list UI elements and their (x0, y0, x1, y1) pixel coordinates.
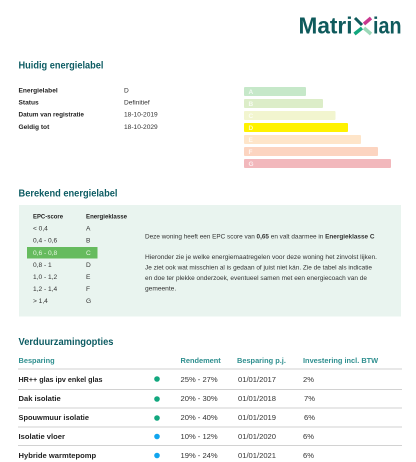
logo: Matrixian: ian (373, 12, 402, 38)
energy label bar chart: G (248, 161, 254, 168)
explanatory text: Hieronder zie je welke energiemaatregelen voor deze woning het zinvolst lijken. (145, 254, 377, 261)
energy label bar chart: E (248, 137, 254, 144)
row: HR++ glas: HR++ glas ipv enkel glas (18, 375, 102, 384)
table header (18, 356, 378, 365)
row: Dak isolatie: 7% (304, 394, 315, 403)
EPC score table: > 1,4 (33, 298, 48, 305)
heading: Berekend energielabel: Berekend energielabel (18, 188, 118, 200)
energy label bar chart: A (248, 89, 254, 96)
label details list: 18-10-2019 (124, 112, 158, 118)
EPC score table: EPC-score (33, 214, 63, 220)
EPC score table: D (86, 262, 91, 269)
row: Isolatie vloer: 01/01/2020 (238, 432, 276, 441)
row: Hybride warmtepomp: Hybride warmtepomp (18, 451, 97, 460)
EPC score table (27, 214, 127, 305)
table header: Rendement (180, 356, 221, 365)
row: Isolatie vloer (18, 432, 314, 441)
label details list: Geldig tot (18, 124, 50, 131)
explanatory text: en doe ter plekke onderzoek, eventueel samen met een energiecoach van de (145, 275, 367, 282)
EPC score table: < 0,4 (33, 226, 48, 232)
EPC score table: E (86, 274, 91, 281)
row: Isolatie vloer: 6% (303, 432, 314, 441)
EPC score table: F (86, 286, 90, 293)
row: Dak isolatie (18, 394, 315, 403)
table header: Investering incl. BTW (303, 356, 378, 365)
row: Isolatie vloer: Isolatie vloer (18, 432, 65, 441)
label details list: Energielabel (18, 88, 58, 94)
EPC score table: 0,4 - 0,6 (33, 238, 58, 244)
label details list: Datum van registratie (18, 112, 84, 118)
heading: Verduurzamingopties: Verduurzamingopties (18, 336, 114, 348)
explanatory text (145, 234, 377, 292)
row: Spouwmuur isolatie: 6% (304, 413, 315, 422)
table header: Besparing (18, 356, 55, 365)
label details list: 18-10-2029 (124, 124, 158, 131)
panel: berekend energielabel (19, 205, 401, 316)
label details list: Status (18, 100, 39, 106)
EPC score table: 0,6 - 0,8 (33, 250, 58, 257)
logo: Matrixian (298, 12, 402, 38)
label details list (18, 88, 158, 131)
energy label bar chart: F (248, 149, 252, 156)
table: verduurzamingopties (18, 356, 402, 460)
row: Spouwmuur isolatie: 01/01/2019 (238, 413, 276, 422)
row: Hybride warmtepomp: 19% - 24% (180, 451, 218, 460)
EPC score table: Energieklasse (86, 214, 127, 220)
row: Hybride warmtepomp: 6% (303, 451, 314, 460)
EPC score table: C (86, 250, 91, 257)
heading: Huidig energielabel: Huidig energielabel (18, 60, 104, 72)
row: Spouwmuur isolatie: Spouwmuur isolatie (18, 413, 89, 422)
EPC score table: G (86, 298, 91, 305)
EPC score table: B (86, 238, 91, 244)
row: HR++ glas: 01/01/2017 (238, 375, 276, 384)
energy label bar chart: C (248, 113, 254, 120)
table header: Besparing p.j. (237, 356, 286, 365)
energy label bar chart (244, 87, 391, 168)
explanatory text: Deze woning heeft een EPC score van 0,65 en valt daarmee in Energieklasse C (145, 234, 375, 240)
EPC score table: 1,2 - 1,4 (33, 286, 58, 293)
row: Hybride warmtepomp (18, 451, 314, 460)
label details list: Definitief (124, 100, 150, 106)
row: Dak isolatie: 01/01/2018 (238, 394, 276, 403)
row: HR++ glas (18, 375, 314, 384)
row: HR++ glas: 25% - 27% (180, 375, 218, 384)
explanatory text: gemeente. (145, 286, 176, 292)
explanatory text: Je ziet ook wat misschien al is gedaan of juist niet kán. Zie de tabel als indicatie (145, 264, 372, 272)
EPC score table: 1,0 - 1,2 (33, 274, 58, 281)
row: Dak isolatie: Dak isolatie (18, 394, 61, 403)
row: Spouwmuur isolatie: 20% - 40% (180, 413, 218, 422)
row: Spouwmuur isolatie (18, 413, 315, 422)
row: Dak isolatie: 20% - 30% (180, 394, 218, 403)
row: Isolatie vloer: 10% - 12% (180, 432, 218, 441)
label details list: D (124, 88, 129, 94)
energy label bar chart: D (248, 125, 254, 132)
EPC score table: A (86, 226, 91, 232)
logo: Matrixian: Matri (298, 12, 352, 38)
row: HR++ glas: 2% (303, 375, 314, 384)
row: Hybride warmtepomp: 01/01/2021 (238, 451, 276, 460)
EPC score table: 0,8 - 1 (33, 262, 52, 269)
energy label bar chart: B (248, 101, 254, 108)
